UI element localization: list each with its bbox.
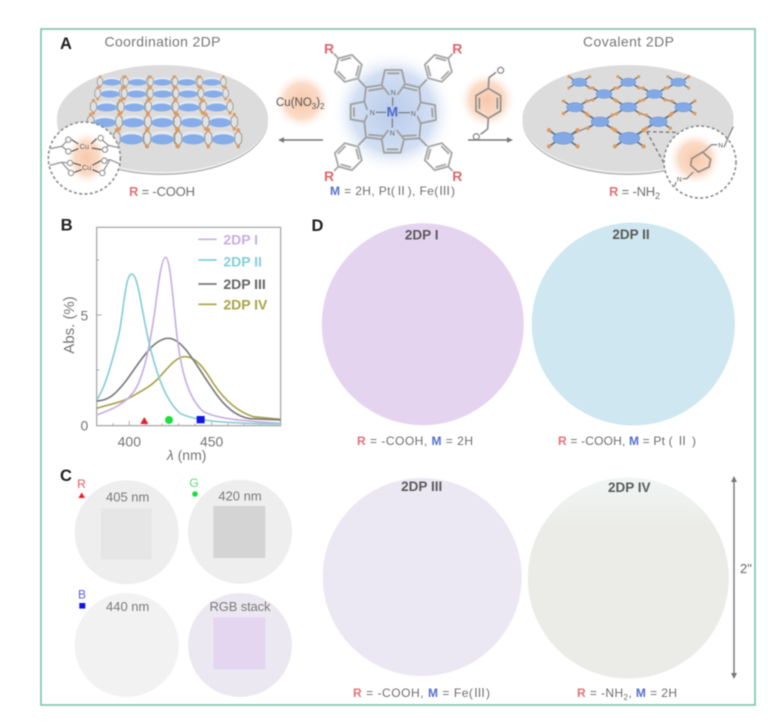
reagent label: copper nitrate: ) — [316, 97, 320, 109]
wafer: 420 nm: 420 nm — [218, 488, 262, 504]
wafer: 2DP I — [322, 223, 524, 425]
legend: 2DP II — [223, 253, 262, 269]
arrow: to coordination 2DP — [278, 137, 323, 143]
glow: copper nitrate — [273, 72, 331, 130]
heading: coordination 2DP: Coordination 2DP — [104, 34, 220, 50]
wafer: RGB stack: RGB stack — [210, 599, 271, 614]
caption: 2DP III: R = -COOH, M = Fe(Ⅲ) — [353, 686, 490, 700]
inset: imine linkage: N — [677, 176, 682, 183]
inset: copper paddlewheel node: Cu — [80, 142, 89, 151]
wafer: 2DP II: 2DP II — [612, 227, 650, 242]
wafer: 2DP I: 2DP I — [405, 228, 438, 242]
porphyrin core structure — [351, 70, 436, 153]
wafer: 2DP III: 2DP III — [401, 479, 442, 494]
caption: R = COOH: R = -COOH — [129, 184, 195, 199]
glow: linker — [458, 71, 516, 129]
inset: imine linkage — [647, 126, 736, 198]
panel label C: C — [60, 467, 72, 485]
covalent 2DP disk with lattice — [522, 65, 734, 175]
marker: blue square — [197, 416, 205, 423]
scale label: 2 inches: 2" — [740, 561, 752, 576]
porphyrin core structure: N — [411, 111, 416, 118]
panel label D: D — [312, 217, 324, 235]
phenyl rings and R groups: R — [452, 41, 462, 57]
curve: 2DP II — [97, 274, 281, 424]
wafer: 2DP III — [323, 478, 522, 676]
scale arrow: wafer diameter — [731, 476, 737, 679]
reagent label: copper nitrate: 3 — [312, 102, 317, 111]
curve: 2DP I — [97, 257, 281, 423]
plot frame — [97, 227, 281, 426]
channel key: B: B — [78, 588, 86, 602]
phenyl rings and R groups: R — [324, 168, 334, 184]
legend — [198, 231, 268, 313]
porphyrin core structure: N — [391, 90, 396, 97]
inset: imine linkage: N — [718, 142, 723, 149]
porphyrin core structure: N — [370, 110, 375, 117]
caption: R = NH2: 2 — [655, 191, 660, 201]
caption: R = NH2: R = -NH — [609, 184, 655, 199]
channel key: R: R — [77, 477, 86, 491]
legend: 2DP III — [223, 276, 266, 292]
wafer: 2DP II — [532, 222, 735, 426]
marker: green circle — [165, 416, 173, 424]
caption: 2DP IV: R = -NH — [577, 686, 623, 700]
channel key: G — [189, 476, 199, 497]
panel label A: A — [60, 35, 72, 53]
arrow: to covalent 2DP — [468, 137, 513, 143]
wafer: 405 nm: 405 nm — [106, 490, 149, 504]
heading: covalent 2DP: Covalent 2DP — [583, 34, 674, 50]
channel key: B — [78, 588, 86, 609]
x axis title: λ (nm) — [166, 447, 206, 463]
caption: 2DP IV: M = 2H — [636, 686, 677, 700]
panel A: synthesis schemes — [48, 34, 736, 201]
caption: 2DP II: R = -COOH, M = Pt ( Ⅱ ) — [558, 434, 696, 448]
wafer: 440 nm: 440 nm — [106, 599, 149, 614]
curve: 2DP IV — [97, 357, 281, 419]
marker: red triangle — [140, 417, 148, 424]
wafer: 2DP IV — [528, 478, 729, 678]
porphyrin core structure: N — [390, 130, 395, 137]
coordination 2DP disk with lattice — [57, 65, 268, 175]
inset: copper paddlewheel node: Cu — [82, 163, 91, 172]
axis ticks — [97, 260, 261, 426]
phenyl rings and R groups — [324, 41, 462, 184]
channel key: R — [77, 477, 86, 498]
y axis title: Abs. (%) — [61, 296, 78, 354]
caption: 2DP I: R = -COOH, M = 2H — [357, 434, 473, 448]
axis tick labels — [81, 307, 224, 450]
phenyl rings and R groups: R — [452, 168, 462, 184]
caption: metal options: M = 2H, Pt(Ⅱ), Fe(Ⅲ) — [330, 184, 455, 198]
axis tick labels: 0 — [81, 418, 89, 434]
inset: copper paddlewheel node — [48, 122, 120, 194]
wafer: 405 nm — [75, 480, 179, 584]
terephthalaldehyde linker — [473, 67, 504, 140]
axis tick labels: 400 — [118, 434, 141, 450]
legend: 2DP IV — [223, 297, 268, 313]
wafer: RGB stack — [188, 593, 292, 697]
glow: porphyrin core — [331, 50, 455, 174]
wafer: 440 nm — [75, 593, 179, 697]
panel D: wafer photographs — [312, 217, 752, 702]
phenyl rings and R groups: R — [324, 41, 334, 57]
caption: 2DP IV: , — [628, 686, 636, 700]
porphyrin core structure: M — [386, 104, 398, 120]
panel label B: B — [61, 216, 73, 235]
axis tick labels: 450 — [200, 434, 224, 450]
axis tick labels: 5 — [81, 307, 89, 323]
reagent label: copper nitrate: 2 — [320, 102, 325, 111]
reagent label: copper nitrate: Cu(NO — [276, 97, 312, 109]
wafer: 420 nm — [188, 480, 292, 584]
legend: 2DP I — [223, 231, 258, 247]
panel C: RGB patterned wafers — [60, 467, 292, 697]
curve: 2DP III — [97, 338, 281, 420]
channel key: G: G — [189, 476, 199, 490]
caption: 2DP IV: 2 — [624, 693, 629, 702]
panel B: absorbance chart — [61, 216, 281, 463]
wafer: 2DP IV: 2DP IV — [608, 480, 651, 495]
